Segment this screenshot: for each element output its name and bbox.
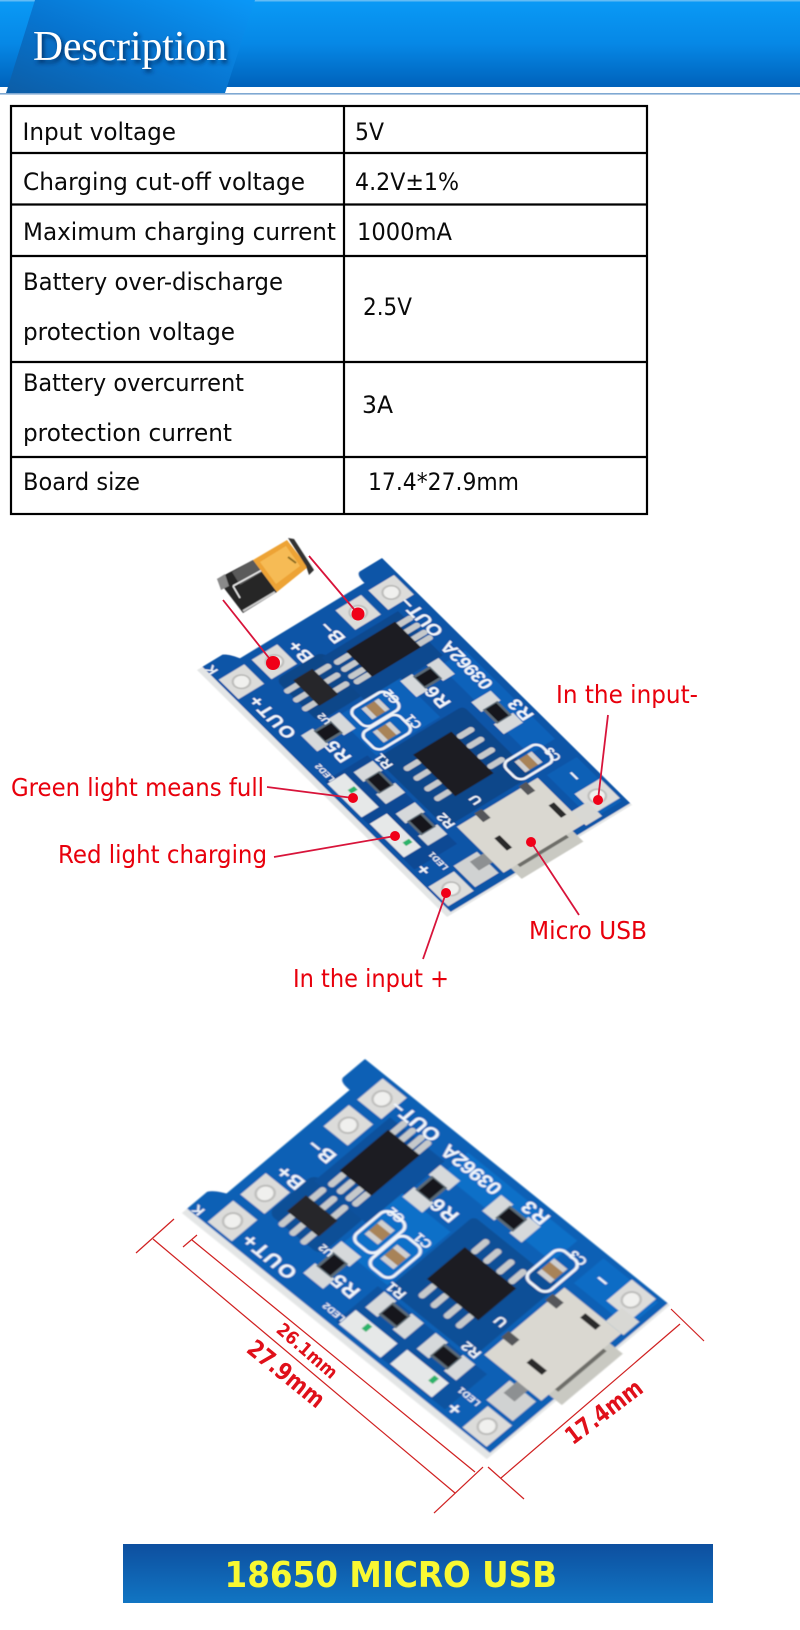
row: charging cut-off voltage [23,168,459,196]
silkscreen labels: B− [314,618,350,647]
silkscreen labels: B− [302,1135,342,1167]
row: board size [23,468,519,496]
micro USB connector [429,766,611,900]
specification table [11,106,647,514]
silkscreen labels: LED2 [312,762,337,783]
row: maximum charging current: 1000mA [357,218,453,246]
silkscreen labels: OUT+ [244,692,301,742]
silkscreen labels: R2 [433,810,458,831]
icon: battery cell [217,538,314,613]
silkscreen labels [188,1062,632,1426]
banner title: 18650 MICRO USB [224,1555,557,1596]
silkscreen labels: OUT+ [237,1229,303,1283]
silkscreen labels: R6 [425,1194,464,1226]
arrow: battery plus to B+ pad [223,600,280,670]
silkscreen labels: U [466,792,486,807]
header band [0,0,800,95]
silkscreen labels: K [188,1202,208,1219]
silkscreen labels: R5 [320,737,356,766]
arrow: red light [274,831,400,857]
micro USB connector [456,1273,650,1433]
heading: Description: Description [33,24,227,70]
callout label: In the input +: In the input + [293,964,449,993]
silkscreen labels: R3 [502,696,538,724]
callout label: Micro USB: Micro USB [529,916,647,945]
silkscreen labels: R3 [516,1196,556,1229]
solder pads [219,574,623,906]
silkscreen labels: LED1 [455,1385,483,1408]
row: charging cut-off voltage: 4.2V±1% [355,168,459,196]
silkscreen labels: R6 [419,683,455,712]
silkscreen labels [203,561,601,885]
annotated charging board [197,558,636,921]
silkscreen labels: 03962A [435,637,498,693]
row: overcurrent protection current: 3A [362,391,394,419]
callout label: Green light means full: Green light means full [11,773,264,802]
silkscreen labels: − [561,767,586,785]
silkscreen labels: R5 [326,1270,365,1302]
silkscreen labels: R1 [382,1279,410,1302]
row: over-discharge protection voltage [23,268,413,346]
silkscreen labels: C2 [380,687,403,706]
silkscreen labels: − [589,1269,616,1292]
row: overcurrent protection current [23,369,394,447]
silkscreen labels: U [490,1312,512,1330]
silkscreen labels: + [410,861,436,879]
row: over-discharge protection voltage: 2.5V [363,293,413,321]
dimensioned charging board [182,1059,675,1463]
LED indicators [339,1309,449,1398]
row: over-discharge protection voltage: protection voltage [23,318,235,346]
silkscreen labels: 03962A [436,1140,508,1199]
silkscreen labels: B+ [282,637,318,666]
silkscreen labels: LED2 [320,1300,348,1323]
callout label: Red light charging: Red light charging [58,840,267,869]
silkscreen labels: OUT− [394,594,448,640]
silkscreen labels: U2 [316,1242,337,1258]
silkscreen labels: OUT− [385,1096,446,1146]
silkscreen labels: C3 [541,745,565,763]
silkscreen labels: C3 [564,1247,591,1269]
arrow: input minus [593,715,608,805]
silkscreen labels: C2 [382,1204,408,1226]
row: over-discharge protection voltage: Battery over-discharge [23,268,283,296]
row: overcurrent protection current: protection current [23,419,232,447]
callout lines and red markers [223,556,608,959]
chip U2 protection IC [274,1184,351,1247]
row: input voltage: Input voltage [22,118,176,146]
row: charging cut-off voltage: Charging cut-off voltage [23,168,305,196]
callout label: In the input-: In the input- [556,680,698,709]
arrow: micro USB [526,837,579,915]
row: board size: 17.4*27.9mm [368,468,519,496]
silkscreen labels: R1 [371,751,396,771]
arrow: battery minus to B- pad [309,556,364,620]
dimension label: 17.4mm: 17.4mm [560,1374,648,1450]
row: input voltage: 5V [355,118,385,146]
LED indicators [328,773,421,858]
header tab [6,0,255,93]
chip U2 protection IC [280,660,352,714]
row: overcurrent protection current: Battery overcurrent [23,369,244,397]
resistors and capacitors [301,647,564,851]
chip TC4056A charger IC [412,1234,532,1333]
silkscreen labels: U2 [315,711,334,726]
silkscreen labels: R2 [457,1338,486,1361]
row: maximum charging current: Maximum charging current [23,218,336,246]
row: input voltage [22,118,385,146]
arrow: input plus [423,888,451,959]
chip TC4056A charger IC [398,722,509,805]
chip U1 small dual MOSFET [325,1118,433,1208]
dimension label: 26.1mm: 26.1mm [272,1319,341,1384]
silkscreen labels: C1 [410,1230,436,1252]
silkscreen labels: + [441,1398,468,1420]
dimension lines [136,1219,704,1513]
row: board size: Board size [23,468,140,496]
circuit board base [197,558,632,917]
resistors and capacitors [303,1152,591,1388]
arrow: green light [267,787,358,803]
solder pads [208,1077,659,1447]
silkscreen labels: LED1 [426,850,451,871]
silkscreen labels: C1 [402,712,425,731]
chip U1 small dual MOSFET [331,613,435,686]
silkscreen labels: B+ [271,1161,310,1194]
product name banner [123,1544,713,1603]
circuit board base [182,1059,670,1459]
dimension label: 27.9mm: 27.9mm [241,1334,331,1414]
silkscreen labels: K [203,663,221,676]
